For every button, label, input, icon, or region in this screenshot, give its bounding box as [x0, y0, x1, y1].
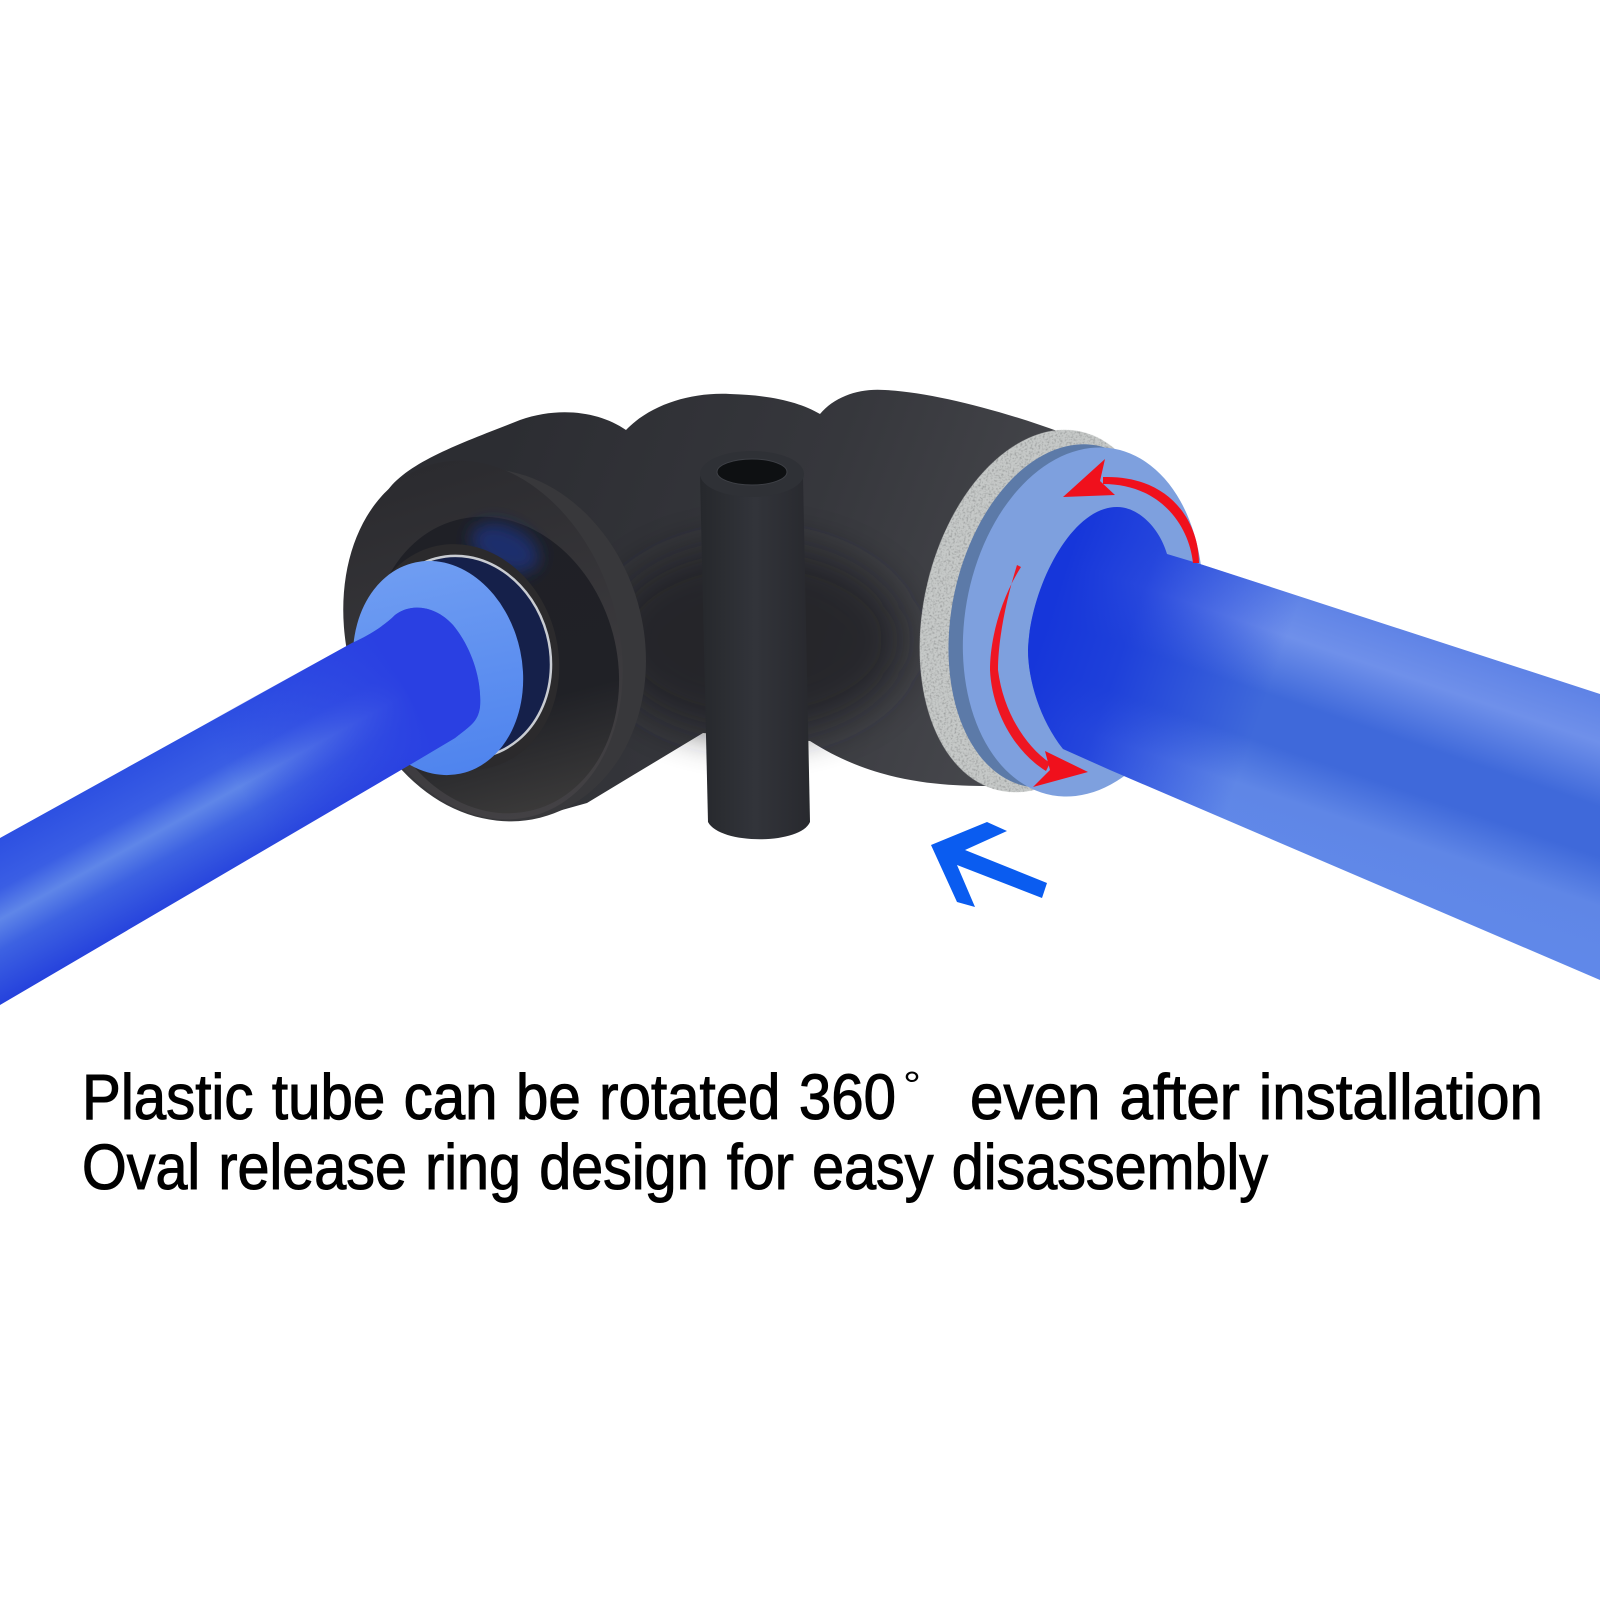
left outer face — [300, 426, 666, 854]
red rotation arrow: top — [1063, 459, 1199, 563]
vertical stem — [700, 451, 810, 839]
caption line 1: even after installation — [970, 1061, 1543, 1133]
right tube socket fade — [1028, 507, 1600, 980]
red rotation arrow: bottom — [990, 565, 1088, 787]
stem barrel — [700, 476, 810, 839]
right tube — [1028, 507, 1600, 980]
stem top — [700, 451, 804, 497]
caption line 1: ° — [903, 1065, 921, 1107]
left fitting end — [0, 426, 683, 1005]
left release ring — [333, 545, 543, 791]
right silver collar — [886, 406, 1194, 816]
shadow on fitting body — [605, 545, 905, 735]
right release ring — [936, 428, 1230, 816]
left inner recess — [338, 489, 652, 841]
left holder ring — [340, 522, 584, 792]
caption line 1: Plastic tube can be rotated 360 — [82, 1061, 896, 1133]
caption line 2: Oval release ring design for easy disassembly — [82, 1131, 1268, 1203]
stem bore — [717, 459, 787, 485]
left blue reflection — [463, 513, 547, 583]
left tube — [0, 608, 480, 1005]
caption line 1 — [82, 1061, 1543, 1133]
left tube socket fade — [190, 608, 480, 894]
left body shoulder — [311, 437, 683, 853]
caption — [82, 1061, 1543, 1203]
blue insertion arrow — [931, 822, 1047, 907]
right fitting end — [886, 406, 1600, 980]
left silver ring — [351, 536, 573, 778]
photo: elbow fitting with tubes — [0, 390, 1600, 1005]
fitting body — [388, 390, 1100, 817]
right groove — [918, 423, 1206, 809]
